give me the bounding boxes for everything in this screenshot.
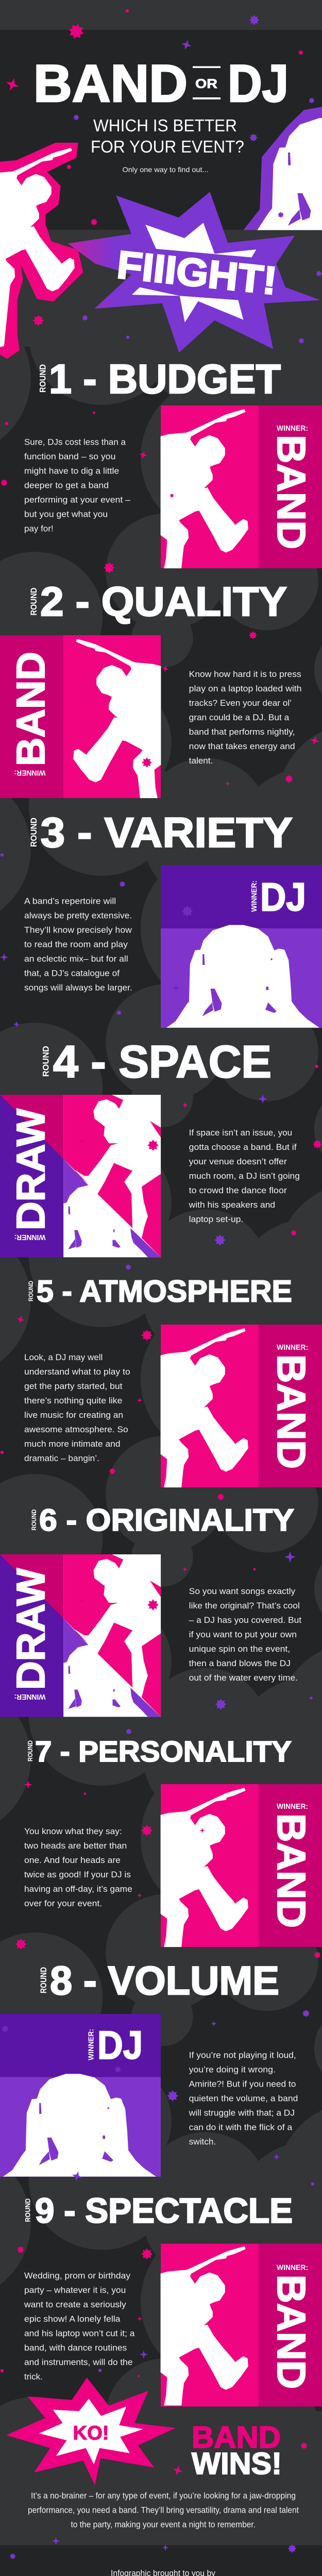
text block: over for your event.	[24, 1899, 102, 1908]
text block: epic show! A lonely fella	[24, 2315, 121, 2324]
panel: draw	[0, 1554, 161, 1717]
text block: A band’s repertoire will	[24, 896, 116, 906]
text block: to crowd the dance floor	[189, 1186, 287, 1195]
heading: 2 - QUALITY	[40, 579, 287, 624]
heading: ROUND	[29, 588, 39, 616]
heading: ROUND	[30, 1509, 38, 1530]
text block	[24, 896, 132, 992]
text block	[24, 1353, 130, 1463]
panel: winner DJ	[161, 865, 322, 1028]
text block: understand what to play to	[24, 1367, 130, 1377]
text block: Look, a DJ may well	[24, 1353, 103, 1362]
panel: winner band	[161, 1325, 322, 1487]
round 6: originality	[0, 1503, 302, 1717]
title: OR	[195, 77, 217, 91]
panel: draw: DRAW	[9, 1109, 53, 1230]
round 7: personality	[24, 1735, 322, 1947]
panel: winner band	[161, 2244, 322, 2406]
text block: will struggle with that; a DJ	[189, 2108, 295, 2117]
heading: ROUND	[27, 1740, 34, 1761]
text block: trick.	[24, 2372, 43, 2382]
heading: 1 - BUDGET	[49, 356, 281, 402]
panel: winner band	[0, 635, 161, 798]
text block: If space isn’t an issue, you	[189, 1128, 292, 1138]
text block: two heads are better than	[24, 1841, 127, 1851]
text block: performing at your event –	[24, 496, 131, 505]
heading: ROUND	[29, 818, 39, 847]
text block	[189, 670, 302, 766]
panel: winner band: WINNER:	[277, 1803, 308, 1811]
panel: winner band: WINNER:	[277, 1344, 308, 1352]
subtitle: FOR YOUR EVENT?	[91, 138, 244, 157]
result: band wins: BAND	[192, 2420, 281, 2454]
text block: there’s nothing quite like	[24, 1396, 123, 1405]
text block: tracks? Even your dear ol’	[189, 699, 292, 708]
text block: deeper to get a band	[24, 481, 109, 490]
text block: and his laptop won’t cut it; a	[24, 2329, 135, 2338]
text block: play on a laptop loaded with	[189, 684, 302, 693]
text block: gotta choose a band. But if	[189, 1143, 297, 1152]
heading: ROUND	[38, 364, 47, 393]
text block: always be pretty extensive.	[24, 911, 132, 920]
text block: band that performs nightly,	[189, 727, 295, 737]
heading: ROUND	[39, 1967, 48, 1993]
text block: party – whatever it is, you	[24, 2286, 126, 2295]
panel: winner band	[161, 405, 322, 568]
text block: So you want songs exactly	[189, 1587, 296, 1596]
burst: fight	[68, 192, 320, 353]
panel: winner DJ: DJ	[97, 2023, 143, 2067]
text block: your venue doesn’t offer	[189, 1157, 287, 1166]
burst: fight: FIIIGHT!	[115, 243, 279, 303]
conclusion text: performance, you need a band. They’ll bring versatility, drama and real talent	[28, 2506, 299, 2515]
text block: now that takes energy and	[189, 742, 295, 751]
panel: winner band: BAND	[269, 435, 313, 549]
result: band wins	[192, 2420, 282, 2481]
round 4: space	[0, 1036, 300, 1257]
text block: You know what they say:	[24, 1827, 122, 1836]
text block: much room, a DJ isn’t going	[189, 1172, 300, 1181]
text block	[189, 1128, 300, 1224]
text block: and instruments, will do the	[24, 2358, 133, 2367]
conclusion text: It’s a no-brainer – for any type of event, if you’re looking for a jaw-dropping	[31, 2492, 296, 2501]
heading: 8 - VOLUME	[50, 1958, 279, 2003]
silhouette: hero guitarist	[0, 143, 83, 359]
conclusion text: to the party, making your event a night to remember.	[71, 2520, 256, 2530]
heading: ROUND	[24, 2198, 32, 2222]
panel: winner DJ: WINNER:	[250, 880, 259, 912]
panel: winner band: WINNER:	[277, 2264, 308, 2272]
text block	[189, 1587, 302, 1683]
text block: live music for creating an	[24, 1411, 123, 1420]
title: BAND	[33, 54, 188, 113]
text block: can do it with the flick of a	[189, 2123, 293, 2132]
text block: then a band blows the DJ	[189, 1659, 291, 1668]
heading: 6 - ORIGINALITY	[39, 1503, 294, 1537]
text block: quieten the volume, a band	[189, 2094, 298, 2103]
title	[33, 54, 289, 113]
text block: an eclectic mix– but for all	[24, 954, 128, 963]
panel: draw: DRAW	[9, 1568, 53, 1690]
panel: draw: WINNER:	[14, 1233, 45, 1241]
text block: one. And four heads are	[24, 1856, 121, 1865]
heading: ROUND	[27, 1281, 35, 1301]
panel: winner band: WINNER:	[14, 769, 45, 777]
result: KO burst: KO!	[73, 2422, 109, 2444]
text block: Amirite?! But if you need to	[189, 2079, 296, 2089]
text block: function band – so you	[24, 452, 115, 462]
panel: winner DJ: WINNER:	[88, 2029, 96, 2060]
text block: if you want to put your own	[189, 1630, 297, 1639]
text block: They’ll know precisely how	[24, 925, 132, 935]
result: KO burst	[6, 2378, 176, 2485]
text block: dramatic – bangin’.	[24, 1454, 99, 1463]
silhouette: hero DJ	[243, 107, 322, 239]
subtitle	[91, 116, 244, 157]
text block: gran could be a DJ. But a	[189, 713, 290, 722]
conclusion text	[28, 2492, 299, 2530]
text block: having an off-day, it’s game	[24, 1885, 132, 1894]
text block: want to create a seriously	[24, 2300, 126, 2310]
text block: but you get what you	[24, 510, 108, 519]
panel: winner band: BAND	[269, 2275, 313, 2389]
panel: winner band: BAND	[9, 652, 53, 766]
text block: that, a DJ’s catalogue of	[24, 969, 120, 978]
round 1: budget	[24, 356, 322, 568]
text block: with his speakers and	[189, 1200, 275, 1210]
text block: pay for!	[24, 524, 54, 534]
hero section	[0, 54, 322, 359]
text block: switch.	[189, 2137, 216, 2146]
text block: songs will always be larger.	[24, 983, 132, 992]
result: band wins: WINS!	[192, 2447, 282, 2481]
text block: talent.	[189, 756, 213, 766]
round 9: spectacle	[24, 2191, 322, 2406]
panel: winner band	[161, 1784, 322, 1947]
text block: like the original? That’s cool	[189, 1601, 300, 1611]
text block: twice as good! If your DJ is	[24, 1870, 131, 1879]
text block	[24, 2272, 135, 2382]
round 3: variety	[24, 809, 322, 1028]
heading: 3 - VARIETY	[40, 809, 293, 856]
text block: Wedding, prom or birthday	[24, 2272, 131, 2281]
panel: draw: WINNER:	[14, 1692, 45, 1701]
heading: 5 - ATMOSPHERE	[37, 1275, 292, 1309]
panel: draw	[0, 1095, 161, 1257]
panel: winner DJ: DJ	[260, 875, 306, 919]
panel: winner DJ	[0, 2014, 161, 2177]
text block: get the party started, but	[24, 1382, 123, 1391]
text block: – a DJ has you covered. But	[189, 1616, 302, 1625]
text block: might have to dig a little	[24, 467, 119, 476]
text block	[24, 1827, 132, 1908]
text block: out of the water every time.	[189, 1673, 298, 1683]
text block: laptop set-up.	[189, 1215, 243, 1224]
round 5: atmosphere	[24, 1275, 322, 1487]
text block	[189, 2050, 298, 2146]
panel: winner band: WINNER:	[277, 425, 308, 433]
heading: ROUND	[41, 1046, 50, 1077]
tagline: Only one way to find out...	[123, 165, 208, 174]
heading: 7 - PERSONALITY	[35, 1735, 292, 1768]
text block: you’re doing it wrong.	[189, 2065, 276, 2074]
round 8: volume	[0, 1958, 298, 2177]
text block: much more intimate and	[24, 1439, 121, 1449]
subtitle: WHICH IS BETTER	[93, 116, 237, 135]
text block	[24, 438, 131, 534]
panel: winner band: BAND	[269, 1814, 313, 1928]
text block: unique spin on the event,	[189, 1645, 290, 1654]
title: DJ	[228, 54, 289, 113]
text block: to read the room and play	[24, 940, 128, 949]
heading: 4 - SPACE	[53, 1036, 272, 1087]
text block: If you’re not playing it loud,	[189, 2050, 296, 2060]
text block: awesome atmosphere. So	[24, 1425, 128, 1434]
decorative stars: tonal on panels	[2, 906, 193, 2073]
heading: 9 - SPECTACLE	[35, 2191, 293, 2230]
text block: Know how hard it is to press	[189, 670, 301, 679]
round 2: quality	[0, 579, 302, 798]
text block: Sure, DJs cost less than a	[24, 438, 126, 447]
text block: band, with dance routines	[24, 2344, 127, 2353]
panel: winner band: BAND	[269, 1354, 313, 1469]
